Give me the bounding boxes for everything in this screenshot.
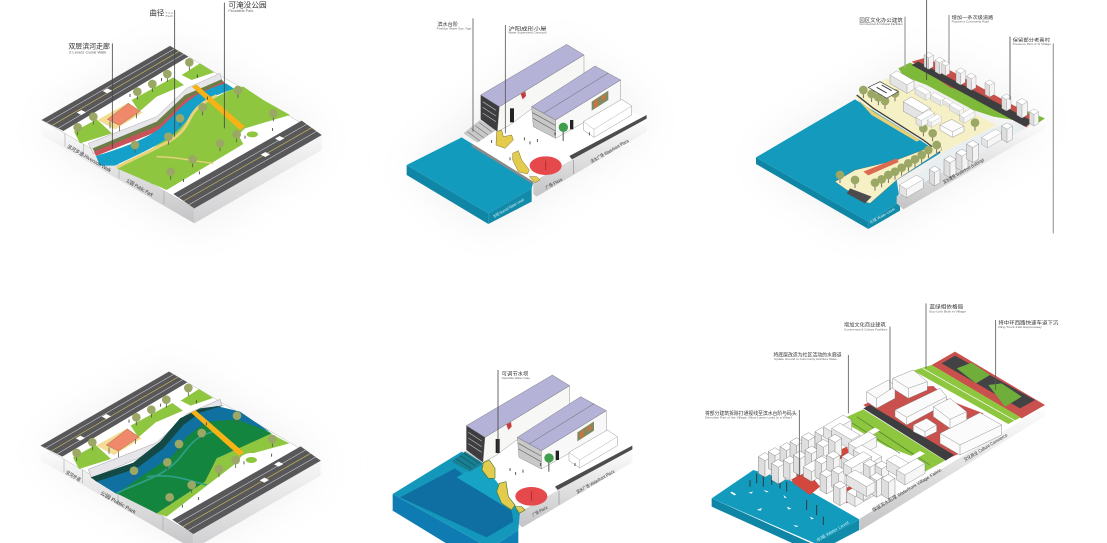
label: expressway underground xyxy=(998,319,1058,329)
green belt xyxy=(898,63,1045,124)
panel: flooded waterfront plaza xyxy=(393,370,632,543)
side caption: 滨水建筑 Waterfront Buildings xyxy=(941,156,986,186)
submerged steps xyxy=(452,452,483,472)
side caption 2: 公园 Public Park xyxy=(125,178,154,199)
label: operable water gate xyxy=(502,370,531,380)
label: demolish part of village xyxy=(705,410,797,419)
planting strip xyxy=(93,79,224,153)
label: two level canal walk: 双层滨河走廊 xyxy=(68,42,110,51)
label: landscape cabin xyxy=(508,25,547,35)
boats xyxy=(730,490,814,527)
side caption 2: 广场 Plaza xyxy=(531,504,549,518)
leader line xyxy=(497,370,499,453)
label: floodable park: 可淹没公园 xyxy=(228,0,267,9)
bank walkway xyxy=(88,399,222,478)
side face xyxy=(860,405,1047,531)
flood water green zone xyxy=(117,408,272,513)
label: community road xyxy=(952,14,994,24)
side caption 2: 广场 Plaza xyxy=(544,176,564,191)
red central ground xyxy=(863,386,983,460)
flood water blue channel xyxy=(95,406,270,494)
label: landscape cabin: 沪阳成形小屋 xyxy=(508,25,547,32)
buildings: cultural campus xyxy=(868,71,975,137)
label: community water corridor: 将底层改造为社区活动的水廊道 xyxy=(773,352,842,359)
bridge, roundabout and trees xyxy=(73,58,278,182)
red running track xyxy=(94,82,226,156)
label: the path: The xyxy=(166,11,173,15)
dense village buildings xyxy=(758,415,925,507)
label: cultural buildings xyxy=(859,17,903,26)
red village lanes xyxy=(790,447,873,503)
base block: roads, lawns and pavilion xyxy=(42,46,322,223)
label: waterfront steps xyxy=(437,21,472,31)
riverbank walkway xyxy=(88,73,222,154)
bridge, roundabout and trees xyxy=(72,384,277,508)
dark expressway xyxy=(942,356,1035,408)
leader lines xyxy=(112,3,224,148)
label: cultural commercial buildings: 增加文化商业建筑 xyxy=(844,322,886,329)
panel: waterfront plaza with dry steps xyxy=(407,18,647,224)
mooring poles xyxy=(750,473,823,525)
pier pavilion roof xyxy=(863,158,899,175)
lower road xyxy=(863,405,954,461)
side caption 2: 文化商业 Culture Commerce xyxy=(962,431,1009,463)
green road medians xyxy=(957,363,1022,407)
water caption: 水域 Normal Water Level xyxy=(491,196,525,219)
yellow stepped seating xyxy=(482,460,525,513)
buildings: front row xyxy=(899,123,1012,198)
label: cultural buildings: Commercial & Cultural Facilities xyxy=(859,22,903,26)
plaza and buildings xyxy=(463,44,647,197)
red upper band xyxy=(932,352,1045,418)
label: eco link: Eco-Link Built in Village xyxy=(929,309,967,313)
dark road xyxy=(912,62,1033,127)
crosswalks xyxy=(865,428,925,459)
shoreline wall xyxy=(857,95,940,153)
land surface xyxy=(767,352,1047,518)
yellow stepped seating xyxy=(496,130,540,183)
side caption: 滨河步道 Riverside Walk xyxy=(66,143,113,174)
label: waterfront steps: 滨水台阶 xyxy=(437,21,458,28)
label: waterfront steps: Position Wave Sys. Ngs xyxy=(437,27,472,31)
water block xyxy=(712,470,859,543)
submerged paths xyxy=(117,432,213,493)
label: cultural buildings: 园区文化办公建筑 xyxy=(859,17,903,24)
label: the path: 曲径 xyxy=(149,8,164,17)
label: expressway underground: 将中环西路快速车道下沉 xyxy=(998,319,1058,326)
label: operable water gate: Operable Water Gate xyxy=(502,376,531,380)
label: community road: 增加一条次级道路 xyxy=(952,14,994,21)
leader lines xyxy=(799,303,996,477)
label: landscape cabin: Water Supervised Cornucoli xyxy=(508,31,547,35)
label: floodable park xyxy=(228,0,267,13)
panel: flooded riverside park xyxy=(41,372,321,543)
label: the path xyxy=(149,8,173,18)
side caption: 保留滨水肌理 Waterfront Village Fabric xyxy=(871,466,944,514)
label: preserve village: Preserve Part of Xi Village xyxy=(1013,42,1052,46)
lawn remaining above flood xyxy=(157,433,289,517)
plaza and buildings shared with dry state xyxy=(449,375,632,527)
linear green strip xyxy=(913,365,1021,424)
leader lines xyxy=(905,15,1053,233)
side face xyxy=(897,118,1045,209)
river xyxy=(96,83,234,166)
dark bank shadow xyxy=(91,405,224,482)
side caption: 滨水广场 Waterfront Plaza xyxy=(589,137,630,165)
label: cultural commercial buildings xyxy=(844,322,888,331)
cream plaza xyxy=(855,78,997,153)
beach strip xyxy=(857,98,920,142)
pier island xyxy=(835,143,942,203)
label: expressway underground: Ring Truck Fast Expressway xyxy=(998,325,1043,329)
label: eco link xyxy=(929,304,967,313)
lower green lawn xyxy=(840,409,945,472)
panel: village renewal masterplan xyxy=(705,303,1058,543)
label: floodable park: Floodable Park xyxy=(228,8,253,13)
label: the path: Path xyxy=(166,14,173,18)
large civic buildings xyxy=(867,370,1002,455)
buildings: preserved village row xyxy=(924,52,1039,126)
leader lines xyxy=(473,18,505,133)
flood water block xyxy=(393,452,520,543)
label: demolish part of village: 将部分建筑拆除打通视线至滨水台阶与码头 xyxy=(705,410,797,417)
leader lines dark xyxy=(927,0,1010,100)
panel: redeveloped waterfront masterplan xyxy=(756,0,1053,233)
side caption: 滨水广场 Waterfront Plaza xyxy=(575,468,616,496)
label: operable water gate: 可调节水坝 xyxy=(502,370,528,377)
label: community road: Propose a Community Road xyxy=(952,20,990,24)
label: demolish part of village: Demolish Part of the Village, Allow Lanes Lead to a Wharf xyxy=(705,415,792,419)
pier paving xyxy=(847,188,872,203)
label: two level canal walk xyxy=(68,42,110,54)
side caption 2: 公园 Public Park xyxy=(99,491,137,516)
label: cultural commercial buildings: Commercial & Culture Facilities xyxy=(844,327,888,331)
front land xyxy=(897,118,1045,202)
label: eco link: 蓝绿相依格局 xyxy=(929,304,963,311)
label: two level canal walk: 2 Levels Canal Walk xyxy=(69,50,107,54)
side caption: 滨河步道 xyxy=(64,469,82,483)
water block xyxy=(756,99,940,229)
red road verge xyxy=(912,57,1035,127)
label: preserve village: 保留部分老喜村 xyxy=(1013,36,1050,43)
label: community water corridor xyxy=(773,352,842,361)
tan footpath xyxy=(117,96,217,168)
water block xyxy=(407,137,533,224)
palm trees xyxy=(836,86,979,191)
label: community water corridor: Update Ground to Community Activities Water xyxy=(774,357,837,361)
quay edge xyxy=(472,143,533,184)
base block shared with dry park xyxy=(41,372,321,543)
park lawn xyxy=(117,87,290,190)
label: preserve village xyxy=(1013,36,1052,46)
water caption: 水域 Water Level xyxy=(868,205,896,225)
panel: flood-free riverside park xyxy=(42,0,322,223)
water caption: 水域 Water Level xyxy=(815,519,850,543)
